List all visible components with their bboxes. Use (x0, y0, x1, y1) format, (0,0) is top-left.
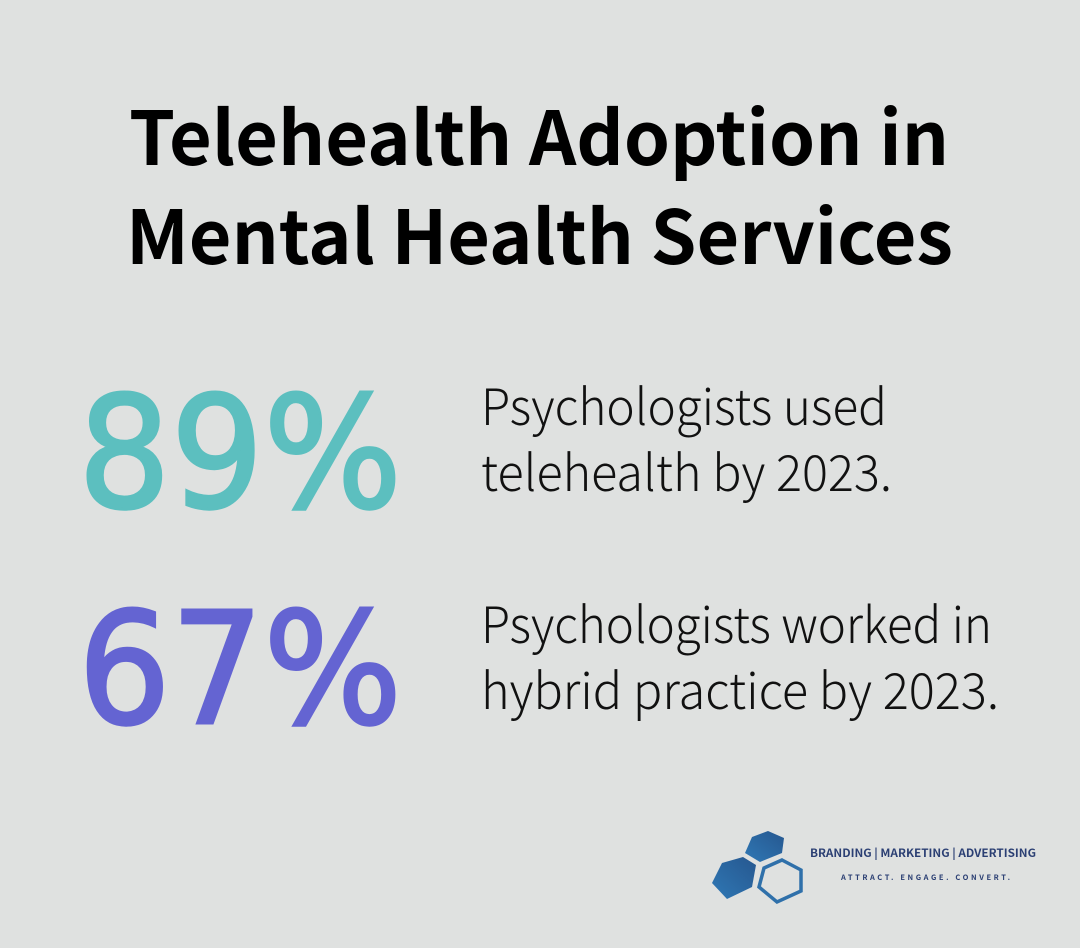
title (126, 80, 953, 286)
stat description: hybrid practice (481, 586, 999, 724)
stat description: telehealth (481, 368, 892, 506)
stat number 67%: 67% (78, 579, 402, 760)
stat description: telehealth: telehealth by 2023. (481, 434, 892, 506)
logo text (810, 845, 1036, 883)
logo (712, 831, 1036, 902)
logo text: BRANDING | MARKETING | ADVERTISING (810, 845, 1036, 861)
title: Telehealth Adoption in (129, 80, 949, 187)
stat: 89 percent (78, 363, 892, 544)
stat: 67 percent (78, 579, 999, 760)
icon: three hexagons (712, 831, 801, 902)
logo text: ATTRACT. ENGAGE. CONVERT. (840, 872, 1010, 883)
stat description: hybrid practice: hybrid practice by 2023. (481, 652, 999, 724)
stat description: telehealth: Psychologists used (481, 368, 887, 440)
title: Mental Health Services (126, 179, 953, 286)
stat number 89%: 89% (78, 363, 402, 544)
stat description: hybrid practice: Psychologists worked in (481, 586, 992, 658)
